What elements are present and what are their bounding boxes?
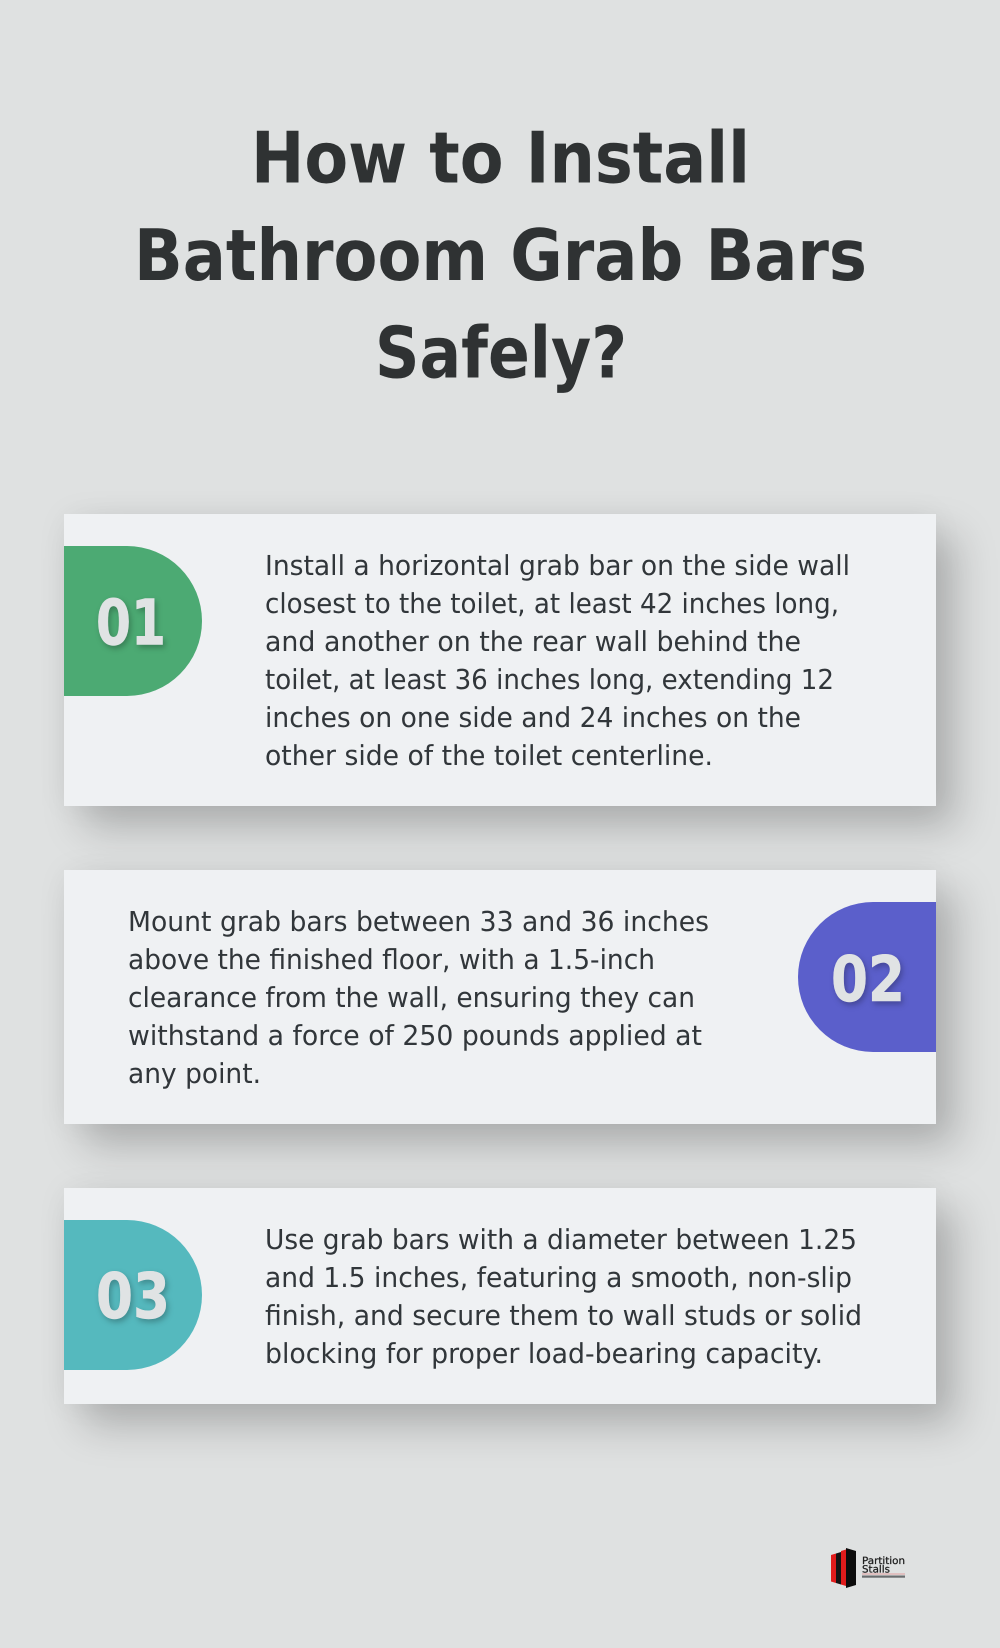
text: step 2 description: Mount grab bars between 33 and 36 inches [128, 906, 709, 938]
text: step 3 description: finish, and secure them to wall studs or solid [265, 1300, 862, 1332]
badge: 03 [64, 1220, 202, 1370]
text: step 1 description: toilet, at least 36 inches long, extending 12 [265, 664, 834, 696]
logo wordmark [862, 1556, 905, 1576]
text: step 3 description [265, 1224, 862, 1370]
text: step 2 description: withstand a force of 250 pounds applied at [128, 1020, 702, 1052]
text: step 2 description: above the finished floor, with a 1.5-inch [128, 944, 655, 976]
text: step 1 description: and another on the rear wall behind the [265, 626, 801, 658]
text: step 1 description: closest to the toilet, at least 42 inches long, [265, 588, 839, 620]
text: step 3 description: Use grab bars with a diameter between 1.25 [265, 1224, 857, 1256]
title [134, 116, 867, 394]
text: step 1 description [265, 550, 850, 772]
panel: step 2 [64, 870, 936, 1124]
text: step 3 description: and 1.5 inches, featuring a smooth, non-slip [265, 1262, 852, 1294]
text: step 1 description: inches on one side and 24 inches on the [265, 702, 801, 734]
text: step 2 description: clearance from the wall, ensuring they can [128, 982, 695, 1014]
text: step 3 description: blocking for proper load-bearing capacity. [265, 1338, 823, 1370]
badge: 01 [64, 546, 202, 696]
text: step 1 description: other side of the toilet centerline. [265, 740, 713, 772]
number: 02: 02 [831, 943, 905, 1016]
text: step 2 description: any point. [128, 1058, 261, 1090]
text: step 2 description [128, 906, 709, 1090]
text: step 1 description: Install a horizontal grab bar on the side wall [265, 550, 850, 582]
panel: step 3 [64, 1188, 936, 1404]
logo wordmark: Partition [862, 1556, 905, 1567]
badge: 02 [798, 902, 936, 1052]
title: Bathroom Grab Bars [134, 214, 867, 297]
number: 01: 01 [96, 586, 166, 660]
number: 03: 03 [96, 1260, 170, 1333]
title: How to Install [251, 116, 750, 200]
icon: partition bars [831, 1548, 856, 1588]
title: Safely? [375, 312, 627, 394]
logo wordmark: Stalls [862, 1564, 890, 1576]
logo: Partition Stalls [831, 1548, 905, 1588]
panel: step 1 [64, 514, 936, 806]
